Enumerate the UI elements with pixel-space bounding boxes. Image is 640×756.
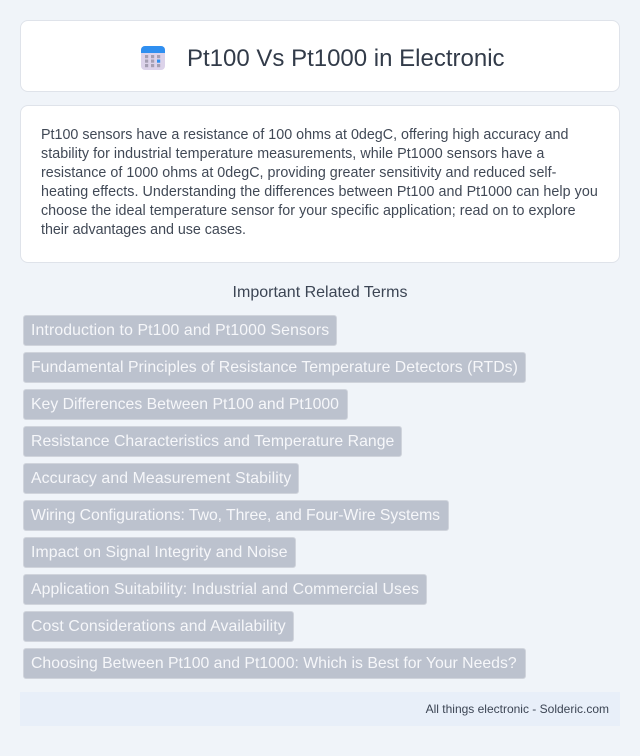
intro paragraph: stability for industrial temperature measurements, while Pt1000 sensors have a [41, 146, 544, 162]
term 9: Cost Considerations and Availability [31, 618, 286, 635]
intro paragraph [41, 127, 598, 238]
term 8 [23, 574, 427, 605]
intro paragraph: choose the ideal temperature sensor for your specific application; read on to explore [41, 203, 576, 219]
intro paragraph: their advantages and use cases. [41, 222, 246, 238]
term 10: Choosing Between Pt100 and Pt1000: Which is Best for Your Needs? [31, 655, 517, 672]
intro paragraph: Pt100 sensors have a resistance of 100 ohms at 0degC, offering high accuracy and [41, 127, 568, 143]
intro paragraph: heating effects. Understanding the differences between Pt100 and Pt1000 can help you [41, 184, 598, 200]
term 6 [23, 500, 449, 531]
term 7: Impact on Signal Integrity and Noise [31, 544, 288, 561]
title: Pt100 Vs Pt1000 in Electronic [187, 45, 505, 72]
term 5 [23, 463, 299, 494]
term 9 [23, 611, 294, 642]
intro paragraph: resistance of 1000 ohms at 0degC, providing greater sensitivity and reduced self- [41, 165, 556, 181]
heading: important related terms: Important Related Terms [233, 284, 407, 301]
term 10 [23, 648, 526, 679]
term 8: Application Suitability: Industrial and Commercial Uses [31, 581, 419, 598]
icon: calendar grid [141, 46, 165, 70]
term 4 [23, 426, 402, 457]
term 1 [23, 315, 337, 346]
list of related terms [23, 315, 526, 679]
term 6: Wiring Configurations: Two, Three, and Four-Wire Systems [31, 507, 440, 524]
term 2 [23, 352, 526, 383]
panel: intro text card [20, 105, 620, 263]
footer bar [20, 692, 620, 726]
term 3 [23, 389, 348, 420]
footer credit: All things electronic - Solderic.com [426, 702, 609, 716]
term 7 [23, 537, 296, 568]
term 1: Introduction to Pt100 and Pt1000 Sensors [31, 322, 329, 339]
term 4: Resistance Characteristics and Temperature Range [31, 433, 394, 450]
term 3: Key Differences Between Pt100 and Pt1000 [31, 396, 339, 413]
term 2: Fundamental Principles of Resistance Temperature Detectors (RTDs) [31, 359, 518, 376]
term 5: Accuracy and Measurement Stability [31, 470, 291, 487]
panel: header card [20, 20, 620, 92]
